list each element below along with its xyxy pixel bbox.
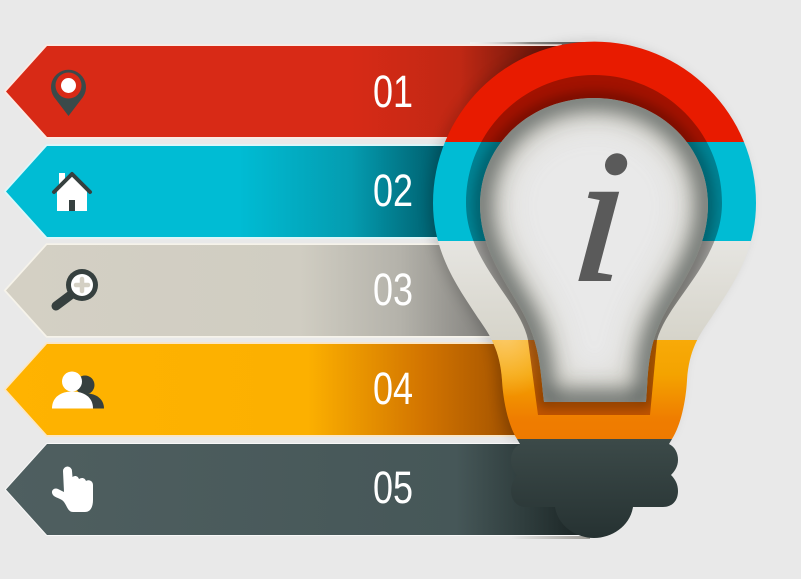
banner 05: pointer [6, 444, 580, 535]
number 03: 03 [373, 264, 413, 315]
inner shadow ring [460, 70, 730, 420]
info letter i: i [565, 111, 637, 322]
banner 01: location [6, 46, 560, 137]
glass window [480, 98, 708, 402]
bulb shadow on banners [428, 42, 751, 439]
number 02: 02 [373, 165, 413, 216]
icon: magnifier [56, 269, 98, 306]
bulb colour bands [420, 40, 770, 439]
banner 03: search [6, 245, 540, 336]
banner 04: people [6, 344, 540, 435]
lamp base [511, 439, 678, 538]
icon: people [52, 372, 104, 408]
number 04: 04 [373, 363, 413, 414]
icon: house [54, 173, 90, 211]
number 01: 01 [373, 66, 413, 117]
bottom edge highlight behind bulb [510, 536, 590, 539]
icon: map pin [51, 70, 86, 116]
number 05: 05 [373, 462, 413, 513]
banner 02: home [6, 146, 540, 237]
top edge highlight behind bulb [470, 42, 590, 46]
light bulb [420, 40, 770, 538]
icon: hand [52, 466, 93, 512]
